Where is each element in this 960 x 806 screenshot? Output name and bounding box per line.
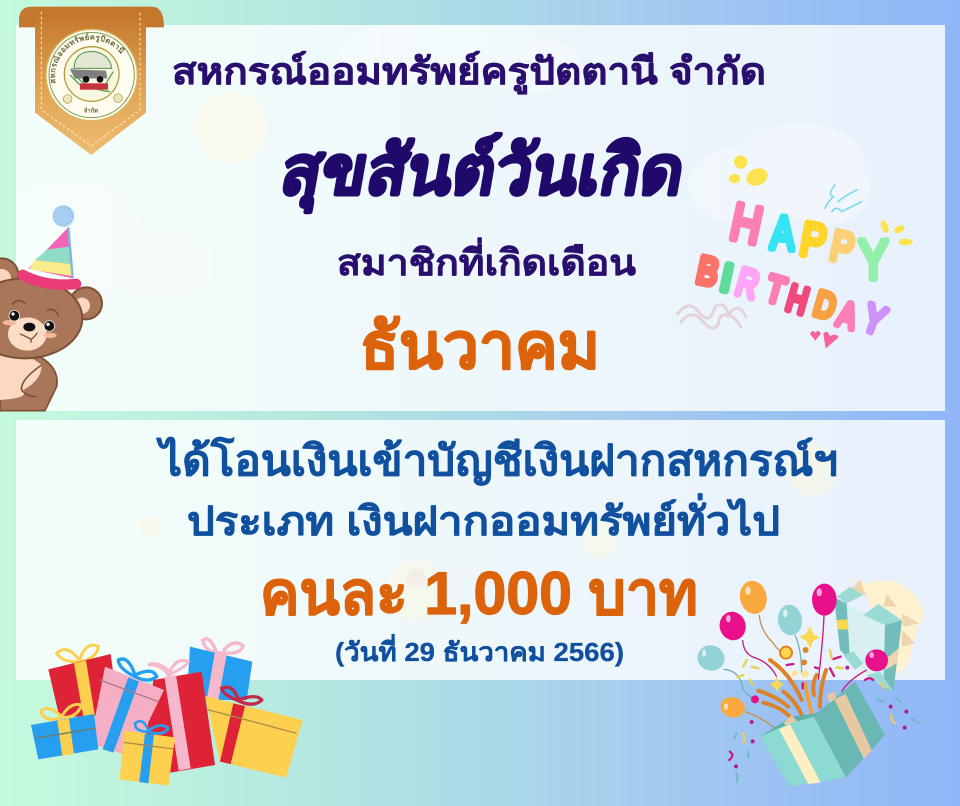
party hat bbox=[23, 206, 76, 285]
confetti and stars bbox=[729, 626, 919, 782]
faint clouds and sun decoration bbox=[195, 91, 267, 163]
gift: tall red box bbox=[147, 660, 215, 773]
icon: happy birthday lettering: H bbox=[726, 193, 767, 255]
cooperative seal bbox=[45, 28, 138, 122]
icon: pile of gift boxes bbox=[31, 639, 303, 786]
gift: red back box bbox=[48, 645, 114, 717]
icon: gift box with balloons and confetti bbox=[694, 578, 923, 787]
badge: ribbon with cooperative seal bbox=[19, 6, 164, 155]
balloon strings bbox=[723, 615, 867, 728]
text: transfer line two: ประเภท เงินฝากออมทรัพย์ทั่วไป bbox=[187, 493, 780, 544]
gift: pink tilted box bbox=[90, 659, 164, 757]
box body bbox=[760, 682, 885, 787]
text: month December: ธันวาคม bbox=[360, 310, 600, 382]
icon: happy birthday lettering: B bbox=[693, 249, 722, 295]
title: cooperative name: สหกรณ์ออมทรัพย์ครูปัตตานี จำกัด bbox=[172, 51, 766, 95]
heading: happy birthday in Thai: สุขสันต์วันเกิด bbox=[275, 132, 691, 213]
icon: happy birthday lettering: P bbox=[797, 213, 830, 268]
panel: bottom details bbox=[16, 420, 945, 680]
icon: happy birthday lettering: Y bbox=[857, 297, 891, 343]
text: date: (วันที่ 29 ธันวาคม 2566) bbox=[335, 633, 624, 667]
icon: happy birthday lettering: H bbox=[782, 277, 813, 322]
icon: happy birthday lettering: R bbox=[732, 261, 763, 308]
open lid with bow bbox=[834, 578, 923, 692]
icon: happy birthday lettering: A bbox=[769, 206, 797, 260]
gift: small blue box bbox=[31, 704, 98, 759]
text: amount per person: คนละ 1,000 บาท bbox=[260, 560, 698, 627]
cooperative seal: จำกัด bbox=[84, 107, 98, 115]
gift: small yellow front box bbox=[120, 721, 175, 786]
panel: top header bbox=[0, 10, 945, 411]
faint flower decoration bbox=[139, 444, 838, 620]
cooperative seal: สหกรณ์ออมทรัพย์ครูปัตตานี bbox=[50, 32, 126, 84]
text: transfer line one: ได้โอนเงินเข้าบัญชีเงินฝากสหกรณ์ฯ bbox=[156, 436, 838, 486]
icon: happy birthday lettering: Y bbox=[859, 229, 888, 290]
icon: happy birthday lettering: A bbox=[833, 294, 861, 337]
icon: happy birthday lettering: T bbox=[761, 268, 790, 313]
icon: happy birthday lettering bbox=[677, 155, 913, 348]
balloons bbox=[694, 578, 888, 720]
gift: blue back box bbox=[187, 639, 252, 700]
icon: bear with party hat bbox=[0, 206, 102, 411]
icon: happy birthday lettering: D bbox=[810, 283, 840, 327]
icon: happy birthday lettering: P bbox=[827, 222, 858, 272]
icon: happy birthday lettering: I bbox=[717, 256, 736, 301]
text: members born in month: สมาชิกที่เกิดเดือน bbox=[337, 237, 636, 283]
streamers bbox=[758, 660, 826, 717]
gift: large yellow box bbox=[205, 687, 303, 778]
